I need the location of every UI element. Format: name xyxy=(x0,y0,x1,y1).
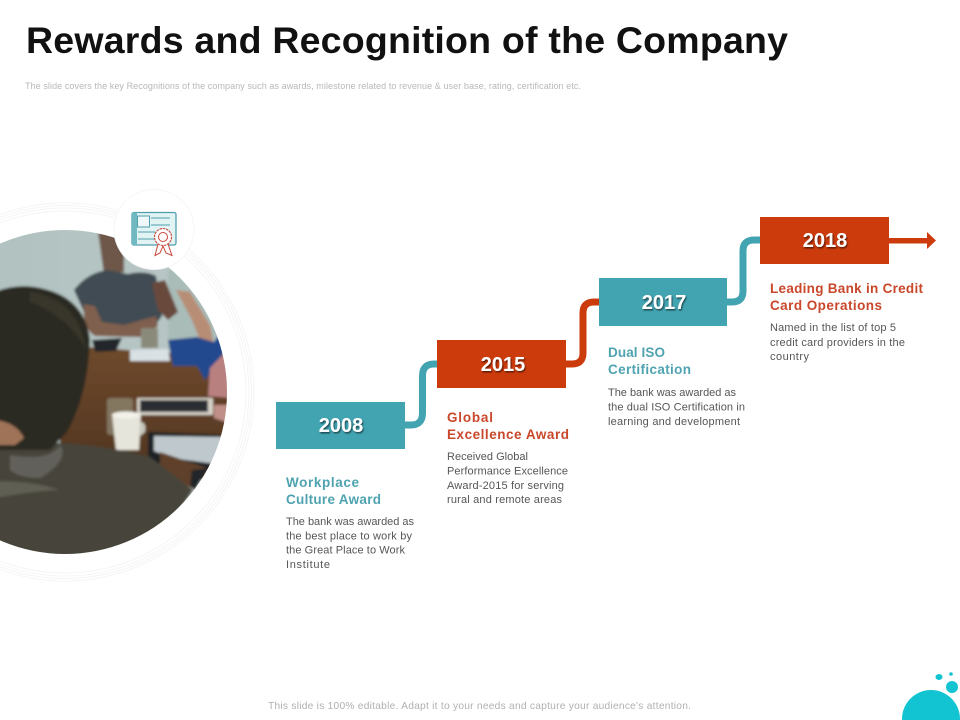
arrow: timeline end xyxy=(888,232,936,249)
milestone 2017 xyxy=(599,278,745,428)
description 2008: Institute xyxy=(286,559,330,571)
year label 2015: 2015 xyxy=(481,354,525,376)
year box 2017 xyxy=(599,278,727,326)
year label 2018: 2018 xyxy=(803,230,847,252)
description 2015 xyxy=(447,451,568,506)
heading: dual iso certification: Certification xyxy=(608,362,691,377)
milestone 2018 xyxy=(760,217,924,363)
heading: dual iso certification xyxy=(608,345,691,377)
year box 2008 xyxy=(276,402,405,449)
description 2015: Performance Excellence xyxy=(447,466,568,478)
heading: global excellence award xyxy=(447,410,569,442)
decorative rings around photo xyxy=(0,203,254,581)
year box 2018 xyxy=(760,217,889,264)
heading: workplace culture award xyxy=(286,475,381,507)
footer note: This slide is 100% editable. Adapt it to your needs and capture your audience's attention. xyxy=(268,701,691,712)
description 2015: Received Global xyxy=(447,451,528,463)
description 2018: credit card providers in the xyxy=(770,337,905,349)
heading: dual iso certification: Dual ISO xyxy=(608,345,665,360)
heading: leading bank xyxy=(770,281,924,313)
connector: 2017 to 2018 xyxy=(727,240,761,302)
description 2017: The bank was awarded as xyxy=(608,387,736,399)
description 2018 xyxy=(770,322,905,363)
decorative bubbles xyxy=(902,672,960,720)
photo: team meeting around a table xyxy=(0,230,227,554)
description 2015: rural and remote areas xyxy=(447,494,562,506)
connector: 2015 to 2017 xyxy=(566,302,600,364)
description 2018: country xyxy=(770,351,810,363)
connector: 2008 to 2015 xyxy=(405,364,438,425)
description 2008: the Great Place to Work xyxy=(286,544,406,556)
description 2008 xyxy=(286,516,414,571)
description 2015: Award-2015 for serving xyxy=(447,480,564,492)
year label 2008: 2008 xyxy=(319,415,363,437)
heading: global excellence award: Excellence Award xyxy=(447,427,569,442)
year label 2017: 2017 xyxy=(642,292,686,314)
title: Rewards and Recognition of the Company xyxy=(26,19,788,61)
description 2017: learning and development xyxy=(608,416,740,428)
icon: certificate with ribbon xyxy=(114,190,194,270)
heading: global excellence award: Global xyxy=(447,410,493,425)
description 2017: the dual ISO Certification in xyxy=(608,402,745,414)
heading: leading bank: Leading Bank in Credit xyxy=(770,281,924,296)
description 2008: the best place to work by xyxy=(286,530,412,542)
milestone 2008 xyxy=(276,402,414,571)
description 2018: Named in the list of top 5 xyxy=(770,322,896,334)
subtitle: The slide covers the key Recognitions of the company such as awards, milestone related to revenue & user base, rating, certification etc. xyxy=(25,81,581,91)
year box 2015 xyxy=(437,340,566,388)
heading: workplace culture award: Culture Award xyxy=(286,492,381,507)
description 2017 xyxy=(608,387,745,428)
heading: leading bank: Card Operations xyxy=(770,298,882,313)
heading: workplace culture award: Workplace xyxy=(286,475,359,490)
milestone 2015 xyxy=(437,340,569,506)
description 2008: The bank was awarded as xyxy=(286,516,414,528)
